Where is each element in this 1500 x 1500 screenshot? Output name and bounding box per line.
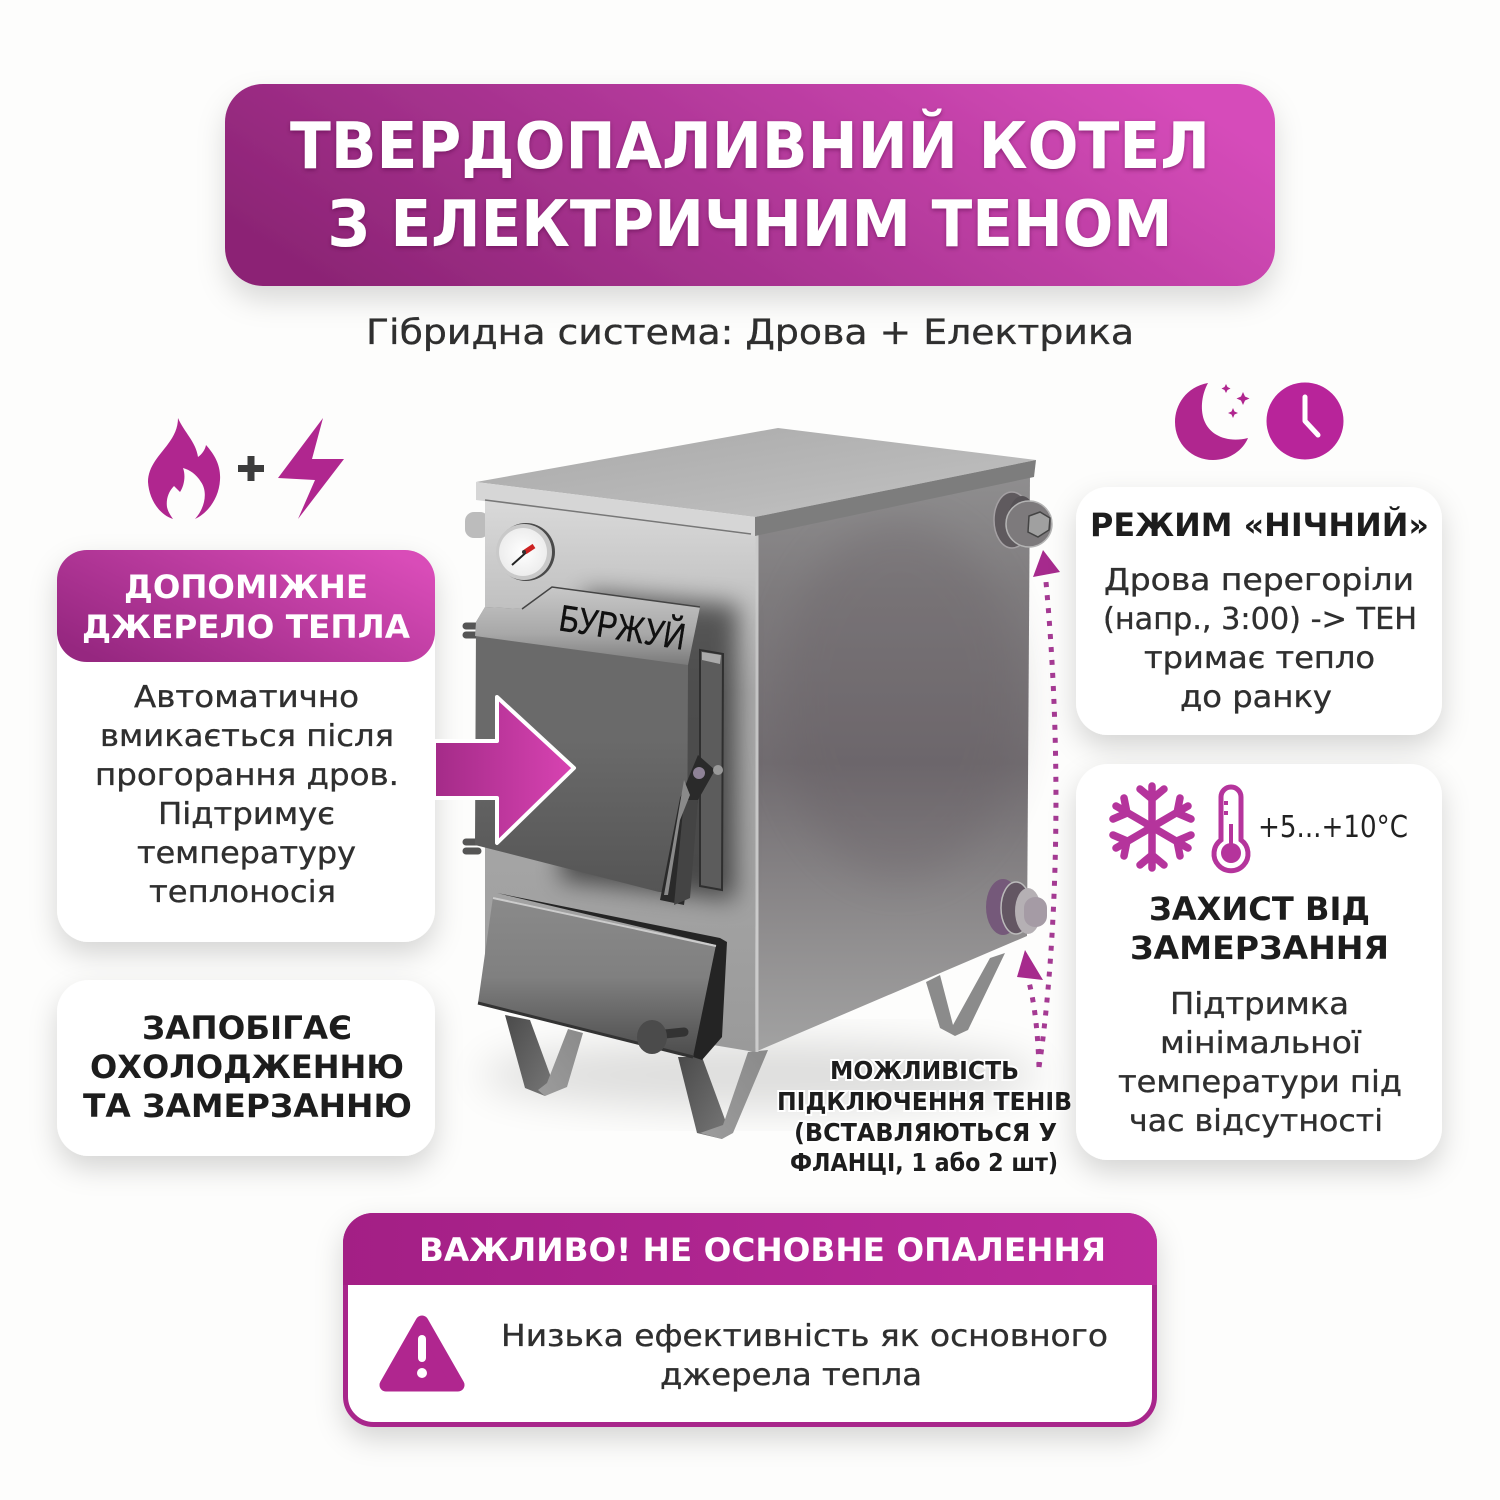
door handle	[660, 755, 723, 905]
arrow pointing to door	[434, 697, 574, 843]
hinges	[466, 626, 478, 851]
panel text: мінімальної	[1160, 1026, 1362, 1061]
panel text	[95, 680, 399, 910]
panel: prevents freezing: ОХОЛОДЖЕННЮ	[90, 1048, 404, 1086]
TEN connection note: (ВСТАВЛЯЮТЬСЯ У	[794, 1118, 1057, 1147]
panel header	[57, 550, 435, 662]
panel: auxiliary heat source	[57, 550, 435, 942]
upper flange	[994, 492, 1052, 548]
icon: snowflake	[1113, 786, 1191, 868]
panel heading	[1130, 890, 1389, 967]
icon: stars	[1222, 384, 1250, 418]
panel text: вмикається після	[100, 719, 394, 754]
door shadow	[560, 592, 738, 900]
panel heading: ДОПОМІЖНЕ	[124, 568, 368, 606]
panel text: тримає тепло	[1144, 641, 1375, 676]
panel text: Підтримка	[1170, 987, 1349, 1022]
brand label: БУРЖУЙ	[556, 596, 688, 658]
dotted arrows	[1017, 550, 1060, 1067]
title banner: ТВЕРДОПАЛИВНИЙ КОТЕЛ	[290, 108, 1210, 184]
panel: prevents freezing	[57, 980, 435, 1156]
panel heading	[82, 568, 410, 646]
panel: prevents freezing: ЗАПОБІГАЄ	[142, 1009, 352, 1047]
panel text: час відсутності	[1129, 1104, 1383, 1139]
icon: warning triangle	[386, 1322, 458, 1385]
icons: moon and clock	[1175, 382, 1344, 460]
panel text: температури під	[1118, 1065, 1402, 1100]
panel text	[1103, 563, 1417, 715]
icon: thermometer	[1214, 787, 1248, 871]
door frame	[700, 650, 723, 890]
title banner	[225, 84, 1275, 286]
panel header	[343, 1213, 1157, 1285]
panel text: Дрова перегоріли	[1104, 563, 1414, 598]
long dotted line	[1039, 582, 1056, 1067]
icon: flame	[148, 418, 220, 519]
panel text: Підтримує	[158, 797, 335, 832]
connection pipe	[465, 512, 489, 538]
panel text: прогорання дров.	[95, 758, 399, 793]
panel text	[1118, 987, 1402, 1139]
front panel	[485, 498, 757, 1052]
lower flange	[986, 879, 1047, 935]
panel heading: ЗАМЕРЗАННЯ	[1130, 929, 1389, 967]
icon: lightning bolt	[278, 418, 344, 519]
panel text: Низька ефективність як основного	[501, 1319, 1108, 1354]
icon: moon	[1175, 383, 1248, 460]
TEN connection note	[777, 1056, 1072, 1177]
panel heading: ЗАХИСТ ВІД	[1149, 890, 1370, 928]
front left leg	[505, 1015, 583, 1096]
panel text: джерела тепла	[660, 1358, 922, 1393]
lower arrowhead	[1017, 950, 1043, 980]
ash door	[478, 893, 727, 1060]
panel: night mode	[1076, 487, 1442, 735]
panel text: теплоносія	[149, 875, 336, 910]
panel: prevents freezing: ТА ЗАМЕРЗАННЮ	[83, 1087, 412, 1125]
firebox door	[475, 587, 700, 892]
floor shadow	[480, 1040, 1040, 1110]
panel: frost protection	[1076, 764, 1442, 1160]
panel heading: РЕЖИМ «НІЧНИЙ»	[1090, 506, 1429, 544]
side panel	[755, 475, 1030, 1052]
subtitle: Гібридна система: Дрова + Електрика	[366, 313, 1134, 353]
icon: plus	[238, 456, 264, 481]
boiler illustration	[465, 428, 1052, 1139]
temperature range: +5...+10°C	[1258, 810, 1408, 845]
TEN connection note: ПІДКЛЮЧЕННЯ ТЕНІВ	[777, 1087, 1072, 1116]
TEN connection note: МОЖЛИВІСТЬ	[830, 1056, 1019, 1085]
title banner: З ЕЛЕКТРИЧНИМ ТЕНОМ	[328, 188, 1172, 262]
gauge	[496, 523, 555, 581]
panel text	[501, 1319, 1108, 1393]
upper arrowhead	[1033, 550, 1060, 577]
TEN connection note: ФЛАНЦІ, 1 або 2 шт)	[790, 1148, 1058, 1177]
panel text: Автоматично	[134, 680, 359, 715]
top plate	[476, 428, 1036, 517]
back leg	[926, 953, 1005, 1036]
panel heading: ДЖЕРЕЛО ТЕПЛА	[82, 608, 410, 646]
panel: important warning	[343, 1213, 1157, 1424]
icons: fire plus lightning	[148, 418, 344, 519]
panel text: до ранку	[1180, 680, 1332, 715]
panel heading: ВАЖЛИВО! НЕ ОСНОВНЕ ОПАЛЕННЯ	[419, 1231, 1106, 1269]
icon: clock	[1266, 382, 1344, 460]
panel text: (напр., 3:00) -> ТЕН	[1103, 602, 1417, 637]
front right leg	[678, 1050, 768, 1139]
panel text: температуру	[137, 836, 356, 871]
short dotted line	[1029, 982, 1039, 1067]
